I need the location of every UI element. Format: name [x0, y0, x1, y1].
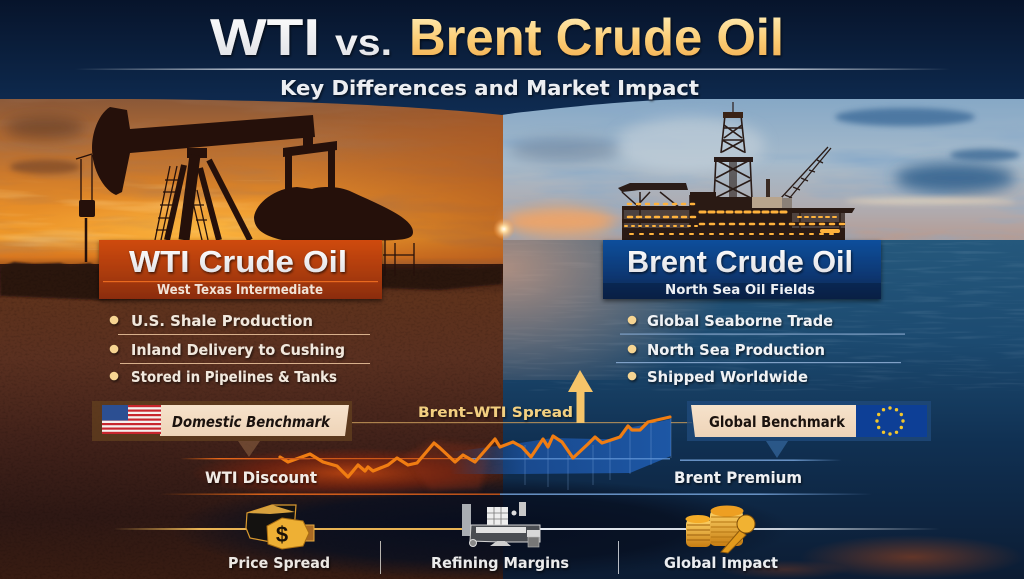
Brent subheading: North Sea Oil Fields — [665, 283, 815, 298]
Brent bullet list: Shipped Worldwide — [647, 368, 808, 386]
price spread label: Price Spread — [228, 554, 330, 572]
domestic label: Domestic Benchmark — [172, 413, 331, 431]
global impact label: Global Impact — [664, 554, 778, 572]
title: Brent Crude Oil — [409, 9, 784, 67]
arrow: spread rising — [568, 370, 593, 423]
title: WTI — [210, 9, 320, 67]
panel: bottom dark band — [170, 478, 1024, 579]
Brent heading: Brent Crude Oil — [627, 244, 853, 279]
refining margins label: Refining Margins — [431, 554, 569, 572]
Brent bullet list — [628, 312, 833, 386]
panel: Brent heading box — [603, 240, 881, 299]
WTI bullet list: U.S. Shale Production — [131, 312, 313, 330]
spread label: Brent–WTI Spread — [418, 405, 573, 421]
WTI bullet list: Inland Delivery to Cushing — [131, 341, 345, 359]
Brent premium label: Brent Premium — [674, 468, 802, 487]
spread chart — [190, 417, 692, 498]
header band — [0, 0, 1024, 115]
title: vs. — [335, 22, 392, 63]
global benchmark badge — [687, 401, 931, 458]
Brent bullet list: Global Seaborne Trade — [647, 312, 833, 330]
subtitle: Key Differences and Market Impact — [280, 76, 699, 100]
WTI bullet list: Stored in Pipelines & Tanks — [131, 368, 337, 386]
icon: gold coins — [686, 506, 755, 553]
icon: EU flag — [856, 405, 927, 437]
domestic benchmark badge — [92, 401, 352, 457]
icon: price spread — [246, 505, 314, 549]
Brent bullet list: North Sea Production — [647, 341, 825, 359]
WTI discount label: WTI Discount — [205, 468, 317, 487]
title — [210, 9, 784, 67]
panel: WTI background — [0, 99, 503, 579]
icon: pumpjack silhouette — [76, 107, 414, 276]
icon: refining plant — [462, 502, 540, 547]
icon: US flag — [102, 405, 161, 434]
global label: Global Benchmark — [709, 413, 846, 431]
panel: Brent background — [493, 99, 1024, 579]
WTI subheading: West Texas Intermediate — [157, 283, 323, 298]
panel: WTI heading box — [99, 240, 382, 299]
WTI heading: WTI Crude Oil — [129, 244, 347, 279]
WTI bullet list — [110, 312, 345, 386]
icon: price spread: $ — [276, 522, 288, 547]
icon: offshore platform — [618, 102, 855, 240]
